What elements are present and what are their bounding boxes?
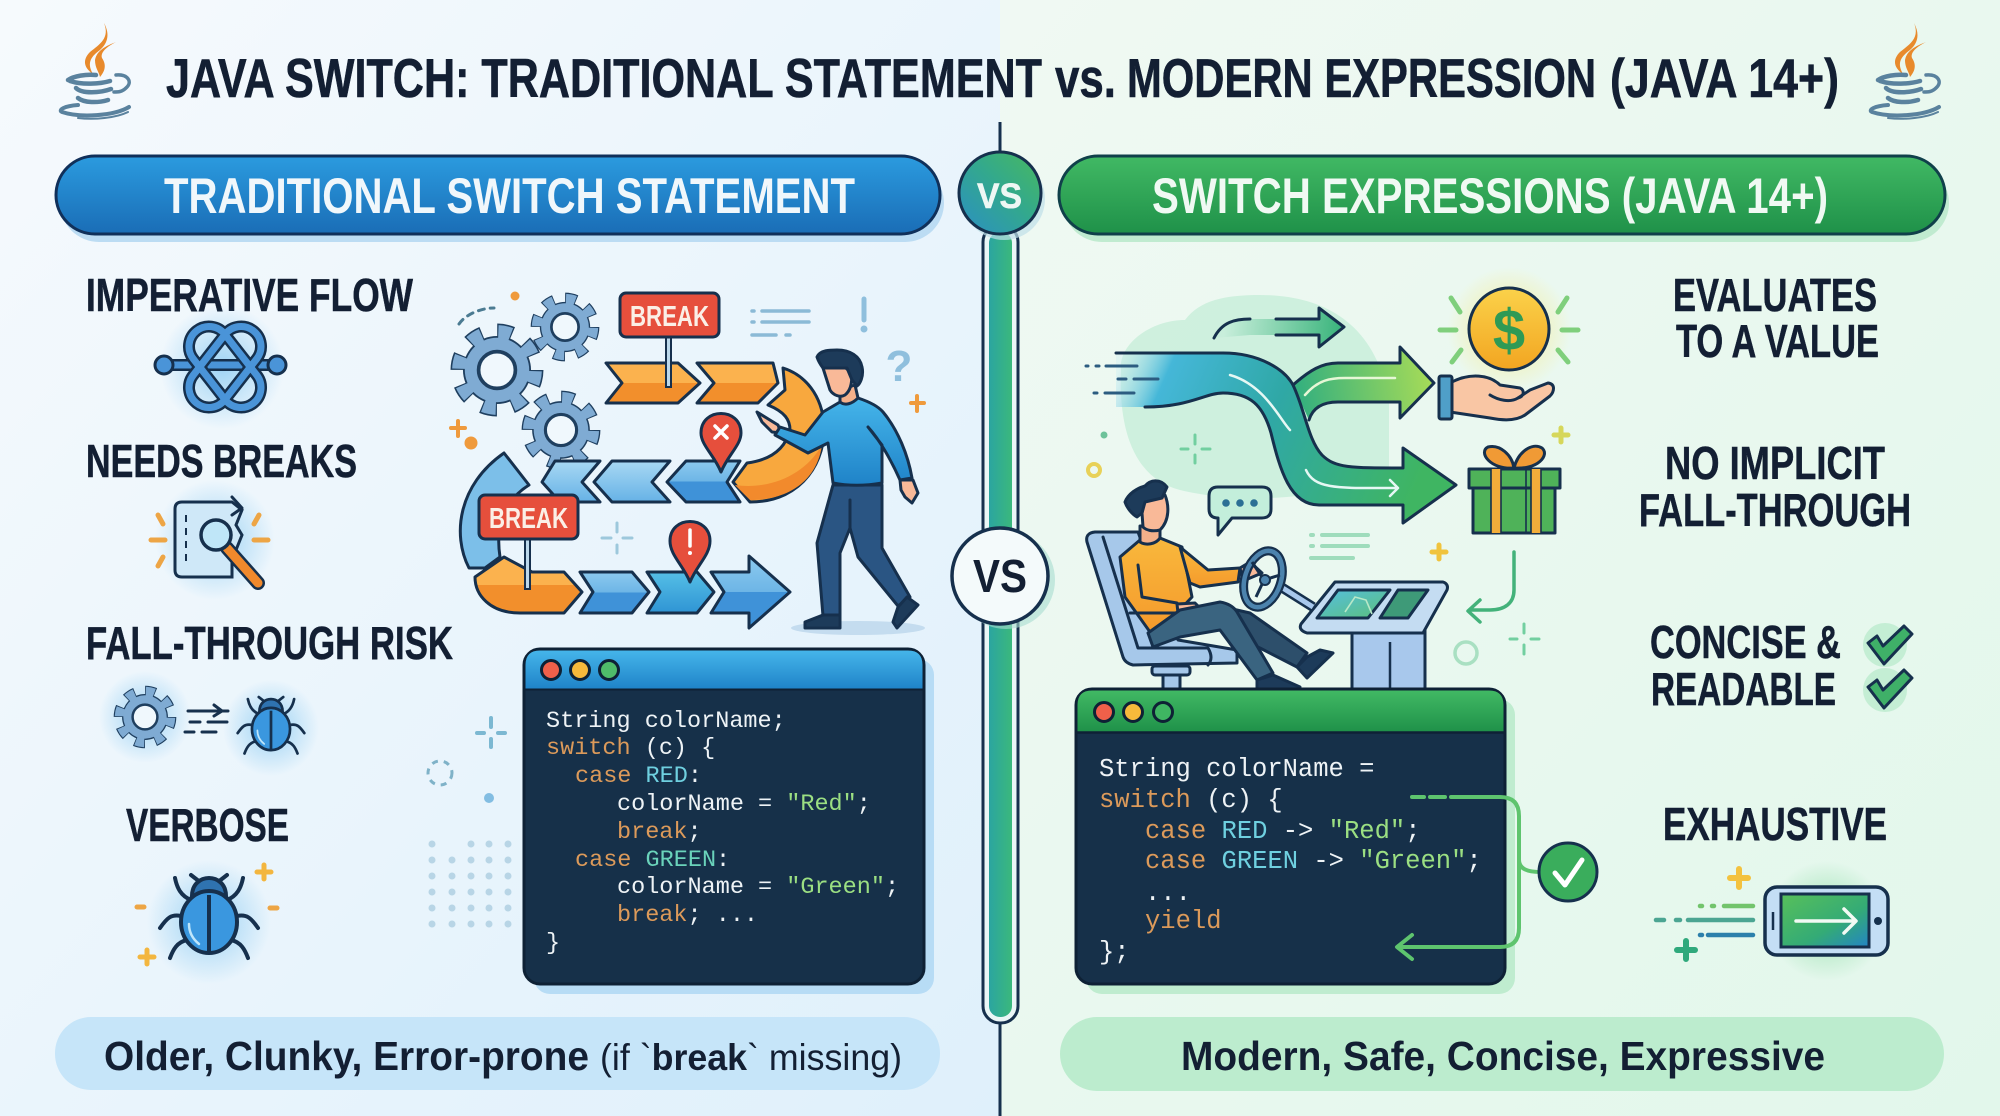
speech bubble — [1209, 487, 1271, 535]
arrow: return to dashboard — [1468, 552, 1514, 622]
icon: java cup right — [1871, 23, 1939, 119]
chevrons: middle row — [542, 461, 740, 502]
right feature: concise and readable: READABLE — [1651, 663, 1836, 715]
sign: break bottom: BREAK — [489, 503, 568, 535]
icon: gold coin: $ — [1493, 298, 1525, 363]
vs badge: center: VS — [973, 550, 1027, 602]
title: JAVA SWITCH: TRADITIONAL STATEMENT — [166, 47, 1042, 109]
illustration: traditional flow — [451, 292, 925, 635]
pin: exclamation — [670, 522, 710, 582]
code text: ... — [1145, 879, 1191, 908]
header pill: expressions: SWITCH EXPRESSIONS (JAVA 14+) — [1152, 168, 1828, 224]
bracket arrow with check badge — [1397, 797, 1597, 959]
code text: switch (c) { — [546, 735, 715, 762]
background: left blue half — [0, 0, 1000, 1116]
title: (JAVA 14+) — [1610, 47, 1839, 109]
title: vs. — [1055, 47, 1116, 109]
dashboard console — [1278, 582, 1448, 695]
upper green arrow — [1293, 347, 1434, 420]
title — [166, 47, 1839, 109]
left feature: imperative flow — [86, 269, 413, 429]
footer pill: expressions: Modern, Safe, Concise, Expressive — [1181, 1033, 1825, 1079]
green blob — [1121, 295, 1389, 498]
code text: }; — [1099, 938, 1130, 967]
person walking — [757, 350, 925, 635]
icon: phone with arrow — [1656, 861, 1888, 981]
right feature: no implicit fall-through: FALL-THROUGH — [1639, 484, 1911, 536]
vs badge: center — [952, 528, 1055, 629]
right feature: concise and readable: CONCISE & — [1650, 616, 1841, 668]
code text: case RED -> "Red"; — [1145, 817, 1420, 846]
icon: gift box — [1469, 446, 1560, 533]
code text: String colorName; — [546, 708, 786, 735]
icon: gear to bug — [99, 671, 319, 776]
footer pill: traditional: Older, Clunky, Error-prone — [104, 1033, 589, 1079]
header pill: expressions — [1059, 156, 1949, 242]
code text: colorName = "Red"; — [617, 791, 871, 818]
main swoosh arrow — [1116, 353, 1456, 523]
heading: imperative flow: IMPERATIVE FLOW — [86, 269, 413, 321]
background: right green half — [1000, 0, 2000, 1116]
code text: switch (c) { — [1099, 786, 1283, 815]
code window: expressions — [1076, 689, 1515, 994]
right feature: evaluates to a value — [1673, 269, 1879, 367]
icon: tangled knot — [155, 305, 286, 429]
vs badge: top — [959, 152, 1045, 240]
footer pill: traditional — [55, 1017, 940, 1090]
driver in seat — [1087, 481, 1333, 691]
icon: bug with sparkles — [137, 860, 277, 984]
center divider — [983, 122, 1018, 1116]
icon: open hand — [1439, 376, 1554, 420]
heading: verbose: VERBOSE — [126, 799, 289, 851]
code text — [1099, 755, 1482, 967]
decorations: flow — [451, 292, 924, 553]
sign: break bottom — [479, 495, 578, 589]
decorations: flow: ? — [886, 342, 912, 391]
footer pill: expressions — [1060, 1017, 1944, 1091]
blue crescent — [460, 453, 529, 568]
icon: gold coin — [1440, 267, 1578, 391]
decorations — [1088, 428, 1568, 664]
illustration: modern flow — [1086, 267, 1578, 695]
heading: needs breaks: NEEDS BREAKS — [86, 435, 357, 487]
right feature: exhaustive: EXHAUSTIVE — [1663, 798, 1887, 850]
code text: case GREEN: — [575, 847, 730, 874]
header pill: traditional — [56, 156, 944, 242]
pin: x — [701, 414, 741, 472]
code text: case GREEN -> "Green"; — [1145, 847, 1482, 876]
code text — [546, 708, 899, 957]
icon: check marks — [1863, 623, 1912, 712]
vs badge: top: VS — [977, 177, 1022, 216]
header pill: traditional: TRADITIONAL SWITCH STATEMENT — [164, 168, 855, 224]
code window: traditional — [524, 649, 934, 994]
code text: String colorName = — [1099, 755, 1374, 784]
right feature: no implicit fall-through — [1639, 437, 1911, 536]
title: MODERN EXPRESSION — [1127, 47, 1596, 109]
decorations left of code — [428, 718, 512, 928]
code text: } — [546, 930, 560, 957]
icon: java cup left — [61, 23, 129, 119]
left feature: needs breaks — [86, 435, 357, 600]
right feature: concise and readable — [1650, 616, 1912, 715]
code text: case RED: — [575, 763, 702, 790]
left feature: fall-through risk — [86, 617, 453, 776]
orange u-turn — [733, 368, 824, 502]
code text: yield — [1145, 907, 1222, 936]
right feature: evaluates to a value: TO A VALUE — [1676, 315, 1879, 367]
footer pill: traditional: (if `break` missing) — [600, 1037, 902, 1078]
icon: broken path with magnifier — [151, 480, 275, 600]
chevrons: top row — [606, 363, 778, 403]
right feature: no implicit fall-through: NO IMPLICIT — [1665, 437, 1885, 489]
left feature: verbose — [126, 799, 289, 984]
code text: colorName = "Green"; — [617, 874, 899, 901]
code text: break; ... — [617, 902, 758, 929]
right feature: evaluates to a value: EVALUATES — [1673, 269, 1877, 321]
code text: break; — [617, 819, 702, 846]
sign: break top: BREAK — [630, 301, 709, 333]
gears — [460, 300, 592, 461]
heading: fall-through risk: FALL-THROUGH RISK — [86, 617, 453, 669]
sign: break top — [620, 293, 719, 387]
right feature: exhaustive — [1656, 798, 1888, 981]
small arrow — [1214, 308, 1344, 347]
chevrons: bottom row — [475, 556, 790, 628]
speed lines — [1086, 366, 1158, 393]
